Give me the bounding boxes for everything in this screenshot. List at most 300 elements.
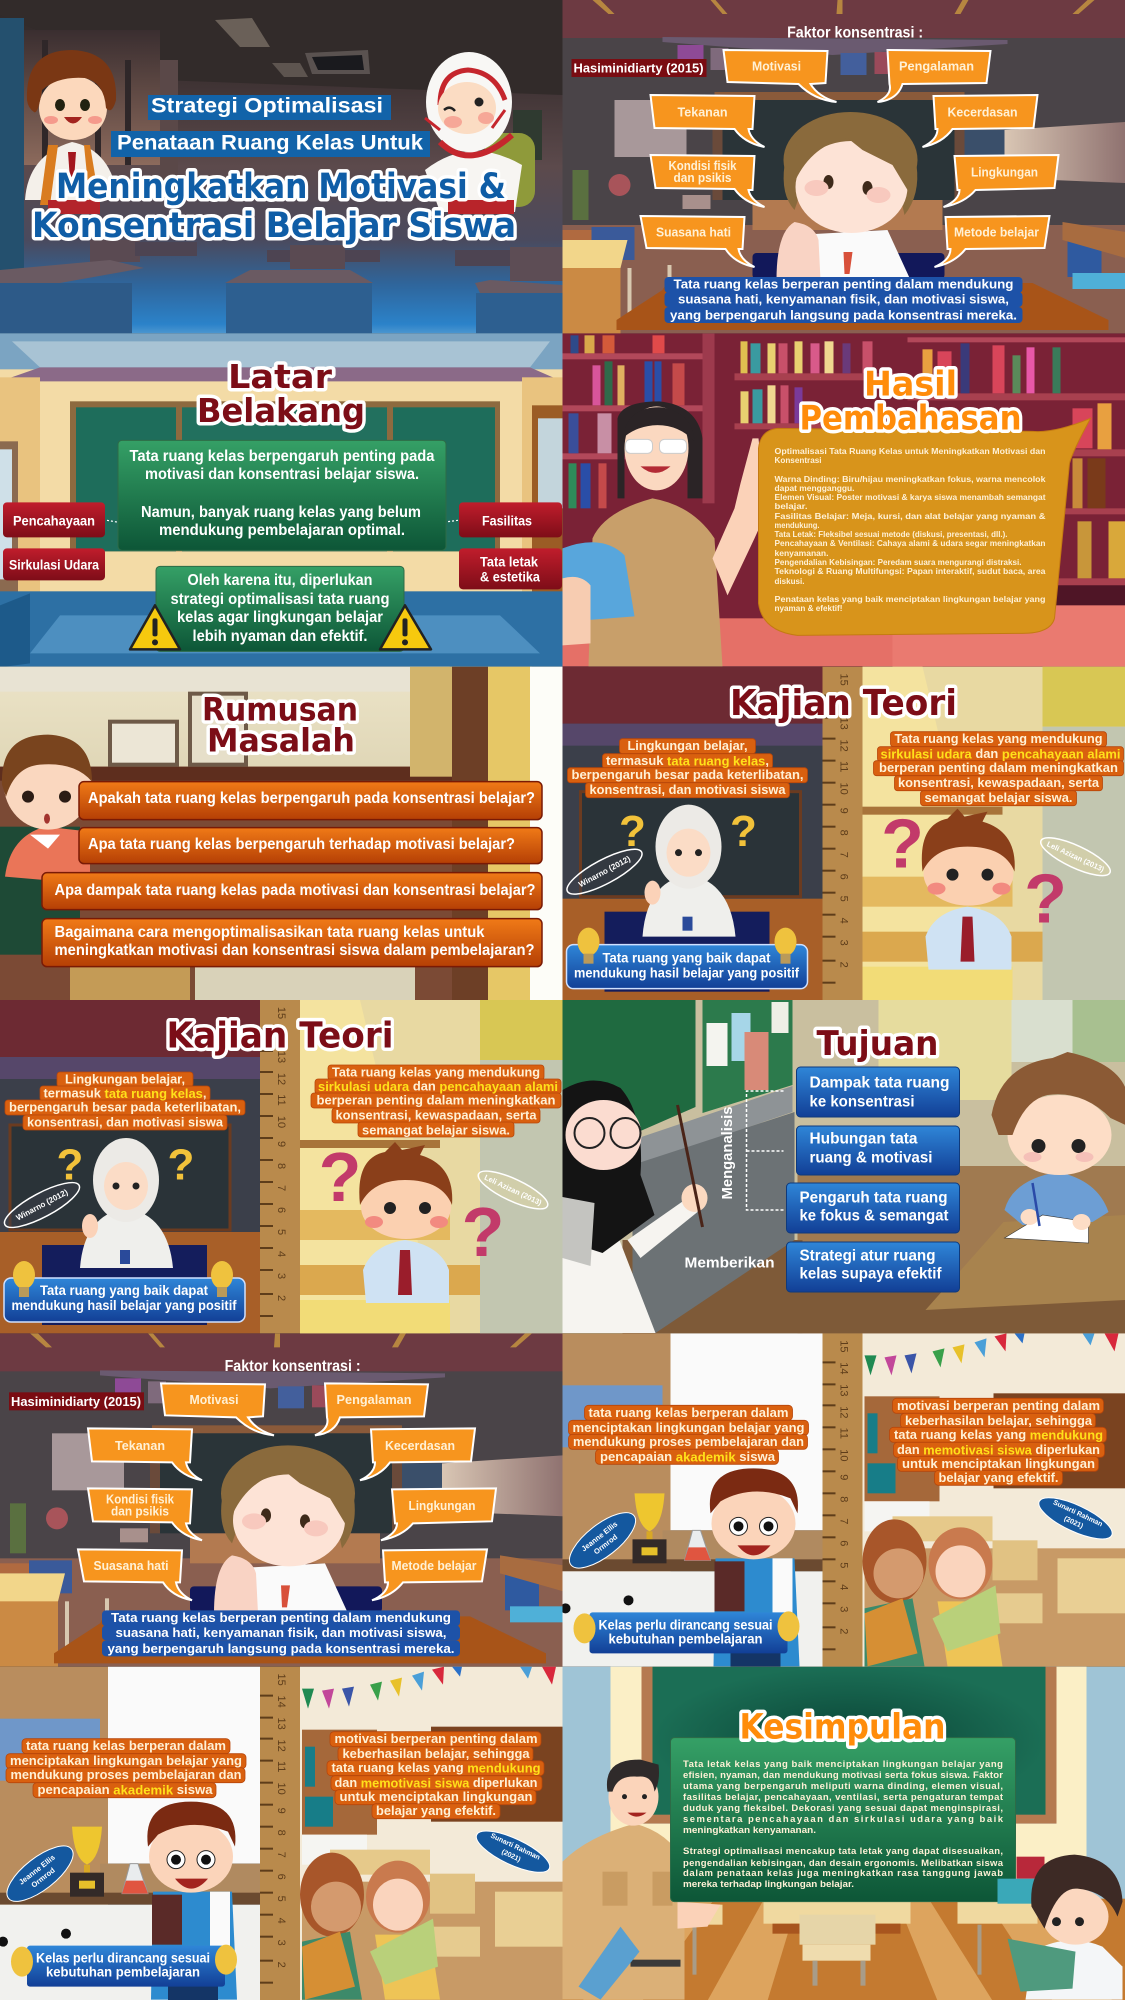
- icon: girl with white hijab: [80, 1138, 173, 1268]
- ruler: 8: [275, 1830, 287, 1836]
- callout: hasil pembahasan text: Pengendalian Kebisingan: Peredam suara mengurangi distraksi.: [774, 558, 1022, 567]
- heading: Kesimpulan: Kesimpulan: [740, 1708, 946, 1748]
- label: Memberikan: Memberikan: [684, 1254, 774, 1272]
- label: Pencahayaan: Pencahayaan: [13, 512, 95, 528]
- bubble: Kecerdasan: Kecerdasan: [385, 1438, 455, 1453]
- callout: hasil pembahasan text: [758, 418, 1090, 635]
- text: motivasi: motivasi berperan penting dalam: [334, 1731, 538, 1746]
- bubble: Metode belajar: Metode belajar: [392, 1558, 476, 1573]
- text: tata ruang sirkulasi: sirkulasi udara dan pencahayaan alami: [880, 746, 1120, 761]
- panel: faktor konsentrasi (top): [562, 0, 1125, 334]
- callout: kelas perlu dirancang: Kelas perlu dirancang sesuai: [598, 1616, 772, 1632]
- bubble: Kecerdasan: Kecerdasan: [948, 104, 1018, 120]
- title banner: Penataan Ruang Kelas Untuk: Penataan Ruang Kelas Untuk: [117, 132, 423, 154]
- main title: Konsentrasi Belajar Siswa: [32, 206, 516, 246]
- callout: hasil pembahasan text: nyaman & efektif!: [774, 604, 842, 613]
- icon: boy with question marks: [319, 1138, 504, 1303]
- icon: light bulbs: [578, 928, 796, 964]
- ruler: 6: [838, 874, 850, 880]
- heading: Tujuan: Tujuan: [816, 1024, 938, 1064]
- ruler: [822, 1333, 862, 1667]
- callout: hasil pembahasan text: Penataan kelas yang baik menciptakan lingkungan belajar yang: [774, 595, 1046, 604]
- panel: kesimpulan: [562, 1666, 1125, 2000]
- ruler: 12: [275, 1740, 287, 1752]
- callout: hasil belajar: mendukung hasil belajar yang positif: [574, 965, 799, 981]
- text box: kesimpulan: dalam penataan kelas juga meningkatkan rasa tanggung jawab: [683, 1868, 1003, 1879]
- panel: tujuan: [562, 1000, 1125, 1334]
- text: tata ruang lab: pencapaian akademik siswa: [600, 1449, 776, 1464]
- bubble: Tekanan: Tekanan: [115, 1438, 165, 1453]
- label: Sirkulasi Udara: [3, 548, 105, 580]
- text box: latar belakang main: [118, 440, 446, 550]
- objective 3: [786, 1183, 960, 1233]
- icon: boy with question marks: [881, 805, 1067, 970]
- panel: hasil pembahasan: [562, 334, 1125, 667]
- ruler: 3: [275, 1273, 287, 1279]
- citation: Hasiminidiarty (2015): Hasiminidiarty (2015): [574, 60, 704, 76]
- callout: hasil pembahasan text: Konsentrasi: [774, 456, 822, 465]
- icon: boy student: [25, 50, 118, 214]
- question 2: [79, 828, 542, 864]
- question 1: [79, 782, 542, 820]
- label: Tata letak & estetika: & estetika: [480, 568, 540, 584]
- ruler: [822, 667, 862, 1001]
- icon: light bulbs: [11, 1945, 237, 1977]
- heading: Kajian Teori: Kajian Teori: [166, 1016, 394, 1056]
- ruler: 4: [275, 1251, 287, 1257]
- icon: trophy and flask: [70, 1827, 148, 1897]
- text: tata ruang lab: mendukung proses pembelajaran dan: [573, 1434, 804, 1449]
- citation oval: Jeanne Ellis Ormrod: Jeanne Ellis: [17, 1853, 57, 1887]
- callout: hasil belajar: mendukung hasil belajar yang positif: [12, 1297, 237, 1313]
- text: motivasi: belajar yang efektif.: [938, 1470, 1058, 1485]
- objective 3: Pengaruh tata ruang: [800, 1190, 948, 1206]
- bubble: Kondisi fisik dan psikis: Kondisi fisik: [668, 159, 737, 173]
- callout: hasil pembahasan text: mendukung.: [774, 521, 820, 530]
- callout: hasil belajar: Tata ruang yang baik dapat: [40, 1282, 208, 1298]
- text: tata ruang sirkulasi: Tata ruang kelas yang mendukung: [894, 731, 1103, 746]
- citation oval: Sunarti Rahman: (2021): [500, 1849, 522, 1864]
- text box: kesimpulan: Strategi optimalisasi mencakup tata letak yang dapat disesuaikan,: [683, 1846, 1003, 1857]
- bubble: Kondisi fisik dan psikis: Kondisi fisik: [106, 1492, 174, 1506]
- text: lingkungan belajar: termasuk tata ruang kelas,: [606, 753, 769, 768]
- heading: Rumusan Masalah: Rumusan: [202, 691, 358, 729]
- ruler: 11: [838, 1428, 850, 1439]
- citation oval: Leli Azizan (2013): Leli Azizan (2013): [483, 1173, 544, 1207]
- text: tata ruang lab: pencapaian akademik siswa: [38, 1782, 213, 1797]
- citation oval: Jeanne Ellis Ormrod: Ormrod: [592, 1532, 620, 1556]
- icon: boy with question marks: ?: [319, 1138, 361, 1216]
- text box: latar belakang main: Namun, banyak ruang kelas yang belum: [141, 504, 421, 521]
- text: motivasi: dan memotivasi siswa diperlukan: [334, 1775, 538, 1790]
- ruler: 3: [838, 940, 850, 946]
- icon: thinking boy: [2, 735, 92, 880]
- bubble: Motivasi: Motivasi: [752, 58, 801, 74]
- ruler: 9: [275, 1808, 287, 1814]
- ruler: 2: [838, 1628, 850, 1634]
- bubble: Pengalaman: Pengalaman: [336, 1392, 412, 1407]
- callout: hasil belajar: [566, 945, 808, 989]
- label: Menganalisis: Menganalisis: [719, 1106, 736, 1200]
- dotted bracket: [746, 1091, 784, 1210]
- objective 1: Dampak tata ruang: [810, 1074, 950, 1092]
- icon: reading children: [862, 1519, 1002, 1666]
- text: lingkungan belajar: termasuk tata ruang kelas,: [44, 1086, 206, 1100]
- panel: rumusan masalah: [0, 666, 562, 1000]
- ruler: 13: [275, 1051, 287, 1063]
- ruler: 9: [838, 808, 850, 814]
- icon: boy with question marks: ?: [881, 805, 924, 883]
- objective 4: kelas supaya efektif: [800, 1266, 942, 1282]
- text: tata ruang sirkulasi: semangat belajar siswa.: [924, 790, 1072, 805]
- bubble: Tekanan: [88, 1428, 202, 1480]
- text: tata ruang lab: mendukung proses pembelajaran dan: [10, 1767, 242, 1782]
- ruler: 3: [275, 1940, 287, 1946]
- callout: kelas perlu dirancang: kebutuhan pembelajaran: [46, 1964, 200, 1980]
- citation oval: Sunarti Rahman: (2021): [1063, 1515, 1084, 1530]
- icon: boy with clipboard: [147, 1802, 237, 2000]
- objective 4: Strategi atur ruang: [800, 1248, 936, 1264]
- panel: lab and reading kids (second): [0, 1666, 562, 2000]
- caption: tata ruang summary: [102, 1610, 460, 1656]
- main title: Meningkatkan Motivasi &: [56, 167, 506, 207]
- ruler: 11: [275, 1094, 287, 1106]
- icon: girl student with hijab: [425, 52, 535, 214]
- icon: boy writing: [992, 1052, 1125, 1243]
- text: lingkungan belajar: berpengaruh besar pada keterlibatan,: [572, 767, 804, 782]
- ruler: 8: [275, 1163, 287, 1169]
- heading: Rumusan Masalah: [202, 691, 358, 760]
- citation oval: Winarno (2012): Winarno (2012): [577, 854, 632, 889]
- text: lingkungan belajar: [568, 738, 808, 798]
- callout: kelas perlu dirancang: [27, 1946, 225, 1987]
- ruler: 13: [838, 718, 850, 730]
- ruler: 5: [275, 1229, 287, 1235]
- text: lingkungan belajar: Lingkungan belajar,: [65, 1072, 185, 1086]
- ruler: 12: [838, 1406, 850, 1418]
- ruler: 9: [838, 1474, 850, 1480]
- citation oval: Sunarti Rahman: [471, 1823, 555, 1880]
- caption: tata ruang summary: Tata ruang kelas berperan penting dalam mendukung: [674, 276, 1014, 292]
- icon: yellow question marks: [619, 807, 757, 856]
- question 4: [42, 919, 542, 967]
- heading: Faktor konsentrasi: Faktor konsentrasi :: [225, 1358, 361, 1375]
- ruler: 4: [838, 918, 850, 924]
- callout: hasil pembahasan text: kenyamanan.: [774, 549, 828, 558]
- label: Tata letak & estetika: [459, 548, 562, 589]
- ruler: 15: [275, 1007, 287, 1019]
- framed certificates: [108, 692, 248, 767]
- icon: girl with white hijab: [642, 805, 736, 937]
- ruler: 13: [838, 1384, 850, 1396]
- panel: latar belakang: [0, 333, 562, 667]
- citation oval: Sunarti Rahman: Sunarti Rahman: [489, 1833, 541, 1862]
- text: motivasi: tata ruang kelas yang mendukung: [332, 1760, 541, 1775]
- citation: Hasiminidiarty (2015): Hasiminidiarty (2015): [11, 1394, 141, 1409]
- text box: kesimpulan: efisien, nyaman, dan mendukung motivasi serta fokus siswa. Faktor: [683, 1770, 1003, 1781]
- bubble: Kondisi fisik dan psikis: dan psikis: [111, 1504, 169, 1518]
- bubble: Tekanan: Tekanan: [678, 104, 728, 120]
- bubble: Pengalaman: Pengalaman: [899, 58, 974, 74]
- heading: Hasil Pembahasan: Hasil: [864, 364, 957, 404]
- callout: hasil pembahasan text: Optimalisasi Tata Ruang Kelas untuk Meningkatkan Motivasi dan: [774, 447, 1046, 456]
- citation oval: Leli Azizan (2013): Leli Azizan (2013): [1045, 839, 1106, 874]
- text box: kesimpulan: sementara pencahayaan dan sirkulasi udara yang baik: [683, 1814, 1004, 1825]
- heading: Faktor konsentrasi: Faktor konsentrasi :: [787, 24, 923, 42]
- bubble: Metode belajar: [372, 1549, 487, 1600]
- bubble: Motivasi: Motivasi: [190, 1392, 238, 1407]
- question 4: meningkatkan motivasi dan konsentrasi siswa dalam pembelajaran?: [54, 942, 534, 959]
- question 3: [42, 873, 542, 910]
- ruler: 14: [275, 1696, 287, 1708]
- ruler: 13: [275, 1718, 287, 1730]
- ruler: 7: [275, 1852, 287, 1858]
- text: motivasi: untuk menciptakan lingkungan: [340, 1789, 533, 1804]
- ruler: 8: [838, 830, 850, 836]
- label: Tata letak & estetika: Tata letak: [480, 553, 538, 569]
- text box: latar belakang main: motivasi dan konsentrasi belajar siswa.: [145, 466, 419, 483]
- icon: yellow question marks: ?: [57, 1140, 83, 1190]
- bubble: Metode belajar: Metode belajar: [954, 224, 1039, 240]
- bubble: Kondisi fisik dan psikis: dan psikis: [674, 171, 732, 185]
- text: tata ruang lab: tata ruang kelas berperan dalam: [26, 1738, 226, 1753]
- ruler: 7: [838, 852, 850, 858]
- text: lingkungan belajar: konsentrasi, dan motivasi siswa: [590, 782, 786, 797]
- classroom desks: [0, 240, 563, 334]
- text box: solusi: lebih nyaman dan efektif.: [192, 628, 368, 645]
- text: tata ruang sirkulasi: konsentrasi, kewaspadaan, serta: [336, 1108, 537, 1122]
- text: lingkungan belajar: konsentrasi, dan motivasi siswa: [27, 1114, 224, 1130]
- citation oval: Sunarti Rahman: [1034, 1490, 1117, 1547]
- ruler: 15: [838, 1340, 850, 1352]
- bubble: Suasana hati: [78, 1549, 192, 1600]
- ruler: 15: [275, 1674, 287, 1686]
- callout: kelas perlu dirancang: kebutuhan pembelajaran: [608, 1630, 762, 1646]
- bunting flags: [864, 1333, 1118, 1375]
- ruler: 8: [838, 1496, 850, 1502]
- bookshelf with books: [562, 333, 1125, 585]
- text: tata ruang lab: [568, 1405, 808, 1464]
- bubble: Motivasi: [724, 50, 836, 102]
- ruler: 2: [275, 1962, 287, 1968]
- heading: Rumusan Masalah: Masalah: [207, 722, 355, 760]
- bubble: Motivasi: [161, 1383, 274, 1435]
- callout: kelas perlu dirancang: [590, 1612, 788, 1653]
- bubble: Suasana hati: Suasana hati: [656, 224, 731, 240]
- icon: yellow question marks: [57, 1140, 194, 1190]
- text: tata ruang sirkulasi: Tata ruang kelas yang mendukung: [332, 1064, 540, 1080]
- bunting flags: [302, 1667, 556, 1709]
- bubble: Kondisi fisik dan psikis: [88, 1488, 202, 1540]
- text: motivasi: untuk menciptakan lingkungan: [902, 1456, 1095, 1471]
- title banner: Strategi Optimalisasi: Strategi Optimalisasi: [151, 94, 383, 118]
- ruler: [260, 1667, 300, 2000]
- ruler: 4: [838, 1584, 850, 1590]
- text: motivasi: [327, 1731, 544, 1819]
- bubble: Lingkungan: Lingkungan: [408, 1498, 476, 1513]
- text box: solusi: strategi optimalisasi tata ruang: [170, 591, 390, 608]
- text: lingkungan belajar: [5, 1072, 245, 1130]
- text box: kesimpulan: duduk yang fleksibel. Dekorasi yang sesuai dapat menginspirasi,: [683, 1803, 1003, 1814]
- question 4: Bagaimana cara mengoptimalisasikan tata ruang kelas untuk: [54, 924, 485, 941]
- ruler: 7: [275, 1185, 287, 1191]
- label: Sirkulasi Udara: Sirkulasi Udara: [9, 556, 99, 572]
- callout: hasil pembahasan text: Elemen Visual: Poster motivasi & karya siswa menambah semangat: [774, 493, 1046, 502]
- objective 3: ke fokus & semangat: [800, 1208, 948, 1224]
- caption: tata ruang summary: yang berpengaruh langsung pada konsentrasi mereka.: [670, 308, 1017, 322]
- text: tata ruang sirkulasi: berperan penting dalam meningkatkan: [316, 1092, 556, 1108]
- icon: reading children: [300, 1853, 440, 2000]
- ruler: 2: [275, 1295, 287, 1301]
- caption: tata ruang summary: yang berpengaruh langsung pada konsentrasi mereka.: [108, 1641, 454, 1656]
- ruler: 12: [275, 1073, 287, 1085]
- bubble: Kondisi fisik dan psikis: [650, 155, 764, 207]
- classroom desks: [680, 1902, 1038, 1986]
- text box: solusi: kelas agar lingkungan belajar: [177, 609, 383, 626]
- text: tata ruang sirkulasi: [311, 1064, 561, 1138]
- bubble: Suasana hati: [640, 216, 754, 267]
- panel: faktor konsentrasi (bottom): [0, 1333, 562, 1667]
- panel: kajian teori (second): [0, 1000, 562, 1334]
- citation oval: Winarno (2012): [562, 841, 647, 902]
- citation oval: Jeanne Ellis Ormrod: Jeanne Ellis: [580, 1519, 619, 1553]
- text: motivasi: [890, 1398, 1106, 1485]
- ruler: 6: [838, 1540, 850, 1546]
- text: motivasi: dan memotivasi siswa diperlukan: [897, 1442, 1100, 1457]
- panel: kajian teori (first): [562, 666, 1125, 1000]
- callout: hasil pembahasan text: dapat mengganggu.: [774, 484, 854, 493]
- text: tata ruang sirkulasi: [874, 731, 1124, 806]
- objective 2: [796, 1126, 960, 1175]
- text box: kesimpulan: meningkatkan kenyamanan.: [683, 1825, 816, 1836]
- heading: Kajian Teori: Kajian Teori: [730, 683, 957, 724]
- text: motivasi: keberhasilan belajar, sehingga: [342, 1746, 530, 1761]
- ruler: 10: [275, 1783, 287, 1795]
- text box: latar belakang main: mendukung pembelajaran optimal.: [159, 522, 405, 539]
- ruler: 15: [838, 674, 850, 686]
- objective 1: ke konsentrasi: [810, 1094, 914, 1110]
- icon: warning right: [380, 605, 431, 649]
- dotted connectors: [107, 520, 458, 548]
- ruler: 3: [838, 1606, 850, 1612]
- callout: kelas perlu dirancang: Kelas perlu dirancang sesuai: [36, 1950, 210, 1966]
- citation oval: Jeanne Ellis Ormrod: Ormrod: [29, 1865, 57, 1890]
- bubble: Kecerdasan: [360, 1428, 475, 1480]
- ruler: 11: [838, 761, 850, 772]
- heading: Hasil Pembahasan: Pembahasan: [800, 398, 1022, 438]
- callout: hasil belajar: [4, 1278, 245, 1322]
- text: motivasi: keberhasilan belajar, sehingga: [905, 1413, 1093, 1428]
- ruler: 6: [275, 1874, 287, 1880]
- bubble: Lingkungan: [944, 155, 1058, 207]
- bubble: Tekanan: [650, 95, 764, 147]
- ruler: 11: [275, 1761, 287, 1772]
- text box: kesimpulan: pengendalian kebisingan, dan desain ergonomis. Melibatkan siswa: [683, 1858, 1004, 1869]
- citation oval: Sunarti Rahman: Sunarti Rahman: [1052, 1499, 1103, 1528]
- text box: solusi: [156, 566, 404, 651]
- text box: kesimpulan: fasilitas belajar, pencahayaan, ventilasi, serta pengaturan tempat: [683, 1792, 1004, 1803]
- ruler: 5: [838, 896, 850, 902]
- text: tata ruang lab: menciptakan lingkungan belajar yang: [10, 1753, 242, 1768]
- objective 4: [786, 1242, 960, 1292]
- panel: lab and reading kids (first): [562, 1333, 1125, 1667]
- caption: tata ruang summary: Tata ruang kelas berperan penting dalam mendukung: [111, 1610, 451, 1625]
- text: tata ruang lab: menciptakan lingkungan belajar yang: [572, 1420, 805, 1435]
- heading: Hasil Pembahasan: [800, 364, 1022, 438]
- citation oval: Jeanne Ellis Ormrod: [0, 1836, 81, 1911]
- bubble: Metode belajar: [934, 216, 1050, 267]
- citation oval: Leli Azizan (2013): [474, 1164, 552, 1216]
- icon: boy with question marks: ?: [462, 1193, 504, 1271]
- callout: hasil pembahasan text: belajar.: [774, 502, 808, 511]
- callout: hasil pembahasan text: Warna Dinding: Biru/hijau meningkatkan fokus, warna mencolok: [774, 475, 1046, 484]
- main title: [32, 167, 516, 246]
- bubble: Pengalaman: [315, 1383, 428, 1435]
- icon: thinking boy: [190, 1445, 382, 1613]
- text box: kesimpulan: Tata letak kelas yang baik menciptakan lingkungan belajar yang: [683, 1759, 1003, 1770]
- text box: kesimpulan: utama yang berpengaruh meliputi warna dinding, elemen visual,: [683, 1781, 1003, 1792]
- text: tata ruang lab: tata ruang kelas berperan dalam: [588, 1405, 789, 1420]
- callout: hasil pembahasan text: Fasilitas Belajar: Meja, kursi, dan alat belajar yang nyaman &: [774, 512, 1046, 521]
- caption: tata ruang summary: [664, 276, 1022, 323]
- text: motivasi: belajar yang efektif.: [376, 1803, 496, 1818]
- icon: warning left: [130, 605, 180, 649]
- callout: hasil pembahasan text: diskusi.: [774, 577, 804, 586]
- callout: hasil belajar: Tata ruang yang baik dapat: [602, 950, 771, 966]
- caption: tata ruang summary: suasana hati, kenyamanan fisik, dan motivasi siswa,: [678, 292, 1009, 306]
- question 1: Apakah tata ruang kelas berpengaruh pada konsentrasi belajar?: [88, 790, 535, 807]
- callout: hasil pembahasan text: Teknologi & Ruang Multifungsi: Papan interaktif, sudut baca, area: [774, 567, 1046, 576]
- text: lingkungan belajar: berpengaruh besar pada keterlibatan,: [9, 1100, 241, 1114]
- citation oval: Leli Azizan (2013): [1036, 831, 1115, 883]
- citation oval: Jeanne Ellis Ormrod: [561, 1503, 644, 1578]
- text: motivasi: motivasi berperan penting dalam: [897, 1398, 1100, 1413]
- label: Fasilitas: [459, 502, 562, 537]
- icon: boy with question marks: ?: [1024, 860, 1067, 938]
- panel: title slide: [0, 0, 562, 334]
- ruler: 6: [275, 1207, 287, 1213]
- ruler: 10: [275, 1116, 287, 1128]
- text: tata ruang sirkulasi: sirkulasi udara dan pencahayaan alami: [318, 1078, 558, 1094]
- icon: thinking boy: [752, 112, 944, 280]
- text box: latar belakang main: Tata ruang kelas berpengaruh penting pada: [130, 448, 435, 465]
- citation oval: Winarno (2012): Winarno (2012): [15, 1187, 70, 1222]
- bubble: Lingkungan: Lingkungan: [971, 164, 1038, 180]
- heading: Latar Belakang: Belakang: [197, 391, 365, 430]
- text: tata ruang lab: [6, 1738, 246, 1798]
- icon: light bulbs: [574, 1611, 800, 1643]
- bubble: Pengalaman: [878, 50, 990, 102]
- ruler: 4: [275, 1918, 287, 1924]
- text: tata ruang sirkulasi: konsentrasi, kewaspadaan, serta: [898, 775, 1100, 790]
- heading: Latar Belakang: Latar: [228, 357, 333, 396]
- bubble: Lingkungan: [381, 1488, 496, 1540]
- text: tata ruang sirkulasi: berperan penting dalam meningkatkan: [879, 760, 1118, 775]
- text: motivasi: tata ruang kelas yang mendukung: [894, 1427, 1103, 1442]
- objective 1: [796, 1067, 960, 1117]
- callout: hasil pembahasan text: Tata Letak: Fleksibel sesuai metode (diskusi, presentasi, dll.).: [774, 530, 1008, 539]
- text: tata ruang sirkulasi: semangat belajar siswa.: [362, 1122, 510, 1138]
- ruler: 12: [838, 740, 850, 752]
- ruler: [260, 1000, 300, 1334]
- icon: reading boy: [998, 1855, 1122, 2000]
- bubble: Suasana hati: Suasana hati: [94, 1558, 168, 1573]
- citation oval: Winarno (2012): [0, 1175, 85, 1235]
- ruler: 10: [838, 783, 850, 795]
- objective 2: ruang & motivasi: [810, 1150, 932, 1166]
- callout: hasil pembahasan text: Pencahayaan & Ventilasi: Cahaya alami & udara segar meningkatkan: [774, 539, 1046, 548]
- icon: teacher with black hijab: [562, 1080, 708, 1333]
